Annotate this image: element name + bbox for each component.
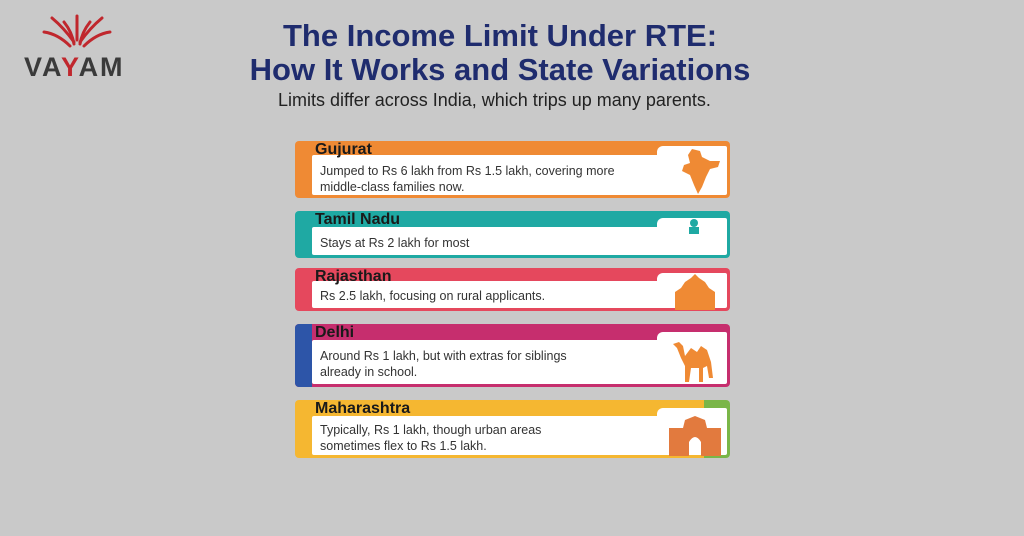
icon: camel [673,342,713,382]
logo: VAYAM [24,52,125,82]
card: Delhi: already in school. [320,365,417,379]
card: Tamil Nadu: Tamil Nadu [315,211,400,228]
icon: india map [682,149,720,194]
card: Rajasthan [295,268,730,311]
card: Tamil Nadu [295,211,730,258]
card: Delhi: Delhi [315,324,354,341]
card: Gujurat: Gujurat [315,141,372,158]
card: Tamil Nadu: Stays at Rs 2 lakh for most [320,236,469,250]
card: Gujurat: Jumped to Rs 6 lakh from Rs 1.5 lakh, covering more [320,164,615,178]
icon: palace [675,274,715,310]
icon: gateway of india [669,416,721,456]
logo [24,14,125,82]
card: Rajasthan: Rs 2.5 lakh, focusing on rural applicants. [320,289,545,303]
card: Rajasthan: Rajasthan [315,268,391,285]
card: Maharashtra: Maharashtra [315,400,410,417]
icon: temple [689,219,699,234]
title: How It Works and State Variations [250,52,750,87]
subtitle: Limits differ across India, which trips up many parents. [278,90,711,110]
card: Gujurat [295,141,730,198]
card: Delhi [295,324,730,387]
card: Maharashtra [295,400,730,458]
title: The Income Limit Under RTE: [283,18,717,53]
card: Delhi: Around Rs 1 lakh, but with extras for siblings [320,349,567,363]
card: Gujurat: middle-class families now. [320,180,464,194]
card: Maharashtra: Typically, Rs 1 lakh, though urban areas [320,423,541,437]
card: Maharashtra: sometimes flex to Rs 1.5 lakh. [320,439,487,453]
title [250,18,750,87]
